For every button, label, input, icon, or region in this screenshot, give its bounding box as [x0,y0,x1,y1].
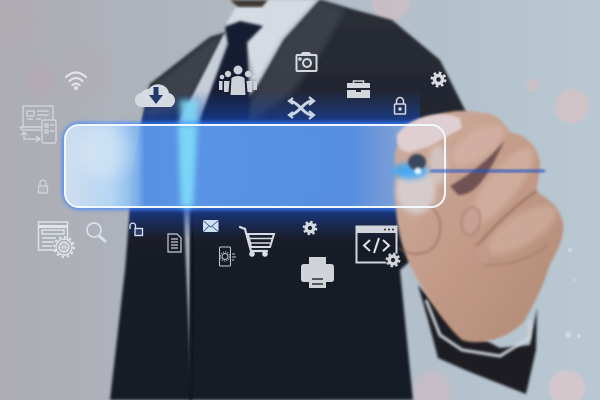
icon: camera [296,53,316,71]
crease under ring finger [484,245,548,265]
cyan shirt reflection [180,100,199,195]
shirt cuff [426,300,530,356]
hand [395,111,564,342]
blue glow behind box [120,90,420,240]
tie [196,21,263,130]
right lapel tone [246,0,345,125]
pen light flare [392,154,545,179]
icon: open padlock [130,223,142,236]
jacket right panel [190,0,480,400]
jacket left shoulder tone [145,36,222,118]
man in suit [110,0,480,400]
icon: magnifier [87,223,105,241]
gap between fingers [450,140,505,195]
icon: shopping cart [240,227,274,257]
lower finger overlay [396,166,436,214]
box fill [65,125,445,207]
icon: gear below box [304,222,316,234]
icon: small lock [38,180,48,193]
jacket left panel [110,32,226,400]
icon: briefcase [347,81,370,98]
icon: browser settings globe [38,222,74,257]
top finger highlight [397,115,462,152]
crease middle and ring fingers [477,191,537,246]
icon: wifi [66,72,86,90]
icon: phone settings [220,247,236,266]
fingernail small [476,243,490,263]
glowing box [64,124,446,208]
icon: envelope [203,220,218,232]
right finger overlay [429,145,447,185]
crease palm [398,205,440,254]
icon: code window with gear [356,226,400,268]
fingernail [459,205,483,237]
box border [65,125,445,207]
neck and collar light [226,0,320,86]
index finger highlight [445,116,511,174]
icon: padlock [394,98,406,114]
icon: printer [301,257,334,288]
jacket sleeve [418,285,537,394]
shirt strip [178,34,228,124]
icon: cloud download [135,84,175,107]
box glow [64,124,446,208]
hand silhouette [395,111,563,342]
cyan streak [178,125,197,207]
ring finger highlight [480,196,564,264]
chin shadow [230,0,268,7]
middle finger highlight [461,139,543,233]
pale left wash [79,126,131,178]
icon: laptop and phone [20,106,56,143]
icon: gear top right [432,73,445,86]
icon: people group [219,66,257,95]
jacket centre opening line [190,215,193,400]
icon: document [168,234,181,252]
icon: shuffle arrows [289,97,314,119]
